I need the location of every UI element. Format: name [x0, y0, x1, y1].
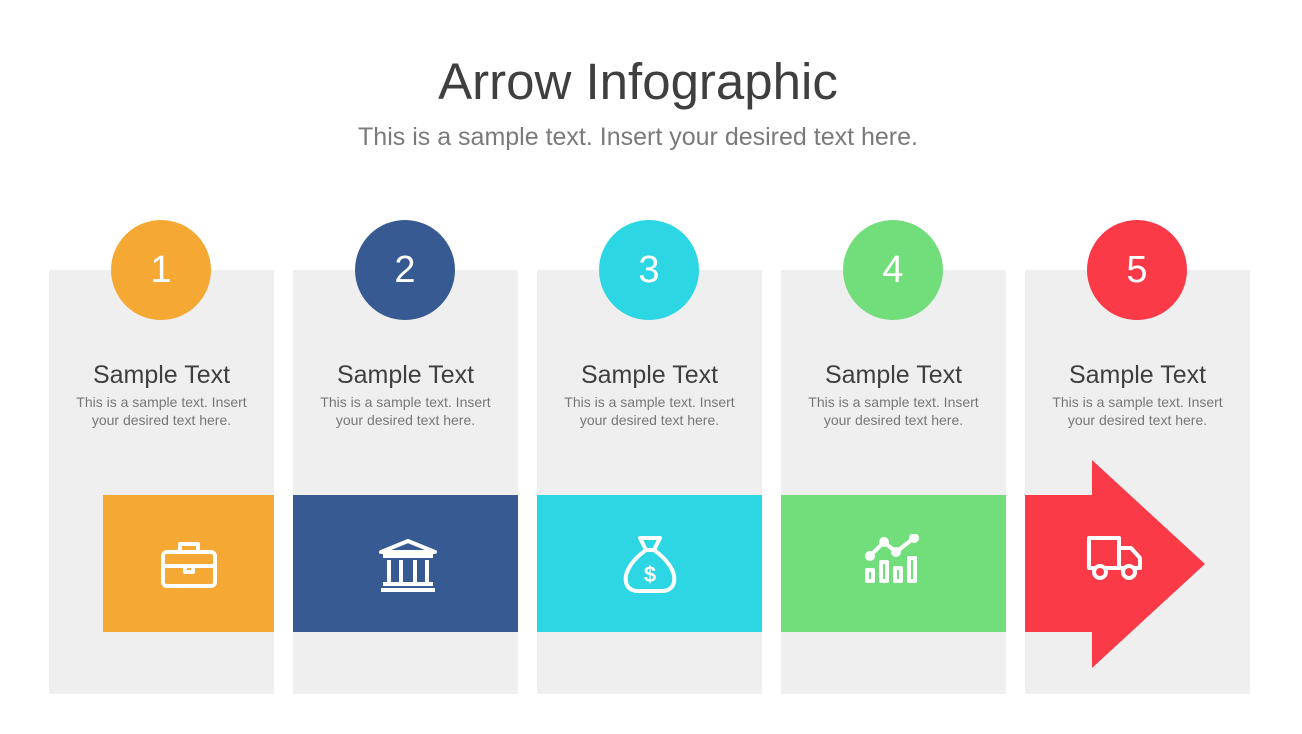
icon: truck	[1087, 536, 1142, 580]
bar 1	[103, 495, 274, 632]
text 5	[1052, 394, 1223, 428]
panel: step 1	[49, 270, 274, 694]
heading 1: Sample Text	[93, 361, 230, 389]
icon: money bag: $	[644, 562, 656, 587]
panel: step 2	[293, 270, 518, 694]
text 3: This is a sample text. Insert	[564, 394, 735, 410]
text 1: your desired text here.	[92, 412, 231, 428]
heading 2: Sample Text	[337, 361, 474, 389]
icon: money bag	[624, 536, 676, 593]
panel: step 4	[781, 270, 1006, 694]
number circle 2: 2	[394, 249, 416, 291]
number circle 5: 5	[1126, 249, 1148, 291]
number circle 2	[355, 220, 455, 320]
text 2: your desired text here.	[336, 412, 475, 428]
text 1: This is a sample text. Insert	[76, 394, 247, 410]
text 3	[564, 394, 735, 428]
heading 3: Sample Text	[581, 361, 718, 389]
number circle 1	[111, 220, 211, 320]
icon: briefcase	[161, 542, 217, 588]
text 5: your desired text here.	[1068, 412, 1207, 428]
title: Arrow Infographic	[438, 53, 838, 110]
number circle 3: 3	[638, 249, 660, 291]
text 1	[76, 394, 247, 428]
number circle 4: 4	[882, 249, 904, 291]
panel: step 5	[1025, 270, 1250, 694]
text 2: This is a sample text. Insert	[320, 394, 491, 410]
number circle 4	[843, 220, 943, 320]
icon: chart	[865, 534, 919, 583]
text 4: your desired text here.	[824, 412, 963, 428]
bar 4	[781, 495, 1006, 632]
number circle 3	[599, 220, 699, 320]
text 4	[808, 394, 979, 428]
bar 3	[537, 495, 762, 632]
panel: step 3	[537, 270, 762, 694]
bar 2	[293, 495, 518, 632]
text 3: your desired text here.	[580, 412, 719, 428]
heading 4: Sample Text	[825, 361, 962, 389]
arrow 5	[1025, 460, 1205, 668]
subtitle: This is a sample text. Insert your desired text here.	[358, 123, 918, 151]
text 2	[320, 394, 491, 428]
text 4: This is a sample text. Insert	[808, 394, 979, 410]
heading 5: Sample Text	[1069, 361, 1206, 389]
number circle 5	[1087, 220, 1187, 320]
number circle 1: 1	[150, 249, 172, 291]
text 5: This is a sample text. Insert	[1052, 394, 1223, 410]
icon: bank	[379, 539, 438, 592]
